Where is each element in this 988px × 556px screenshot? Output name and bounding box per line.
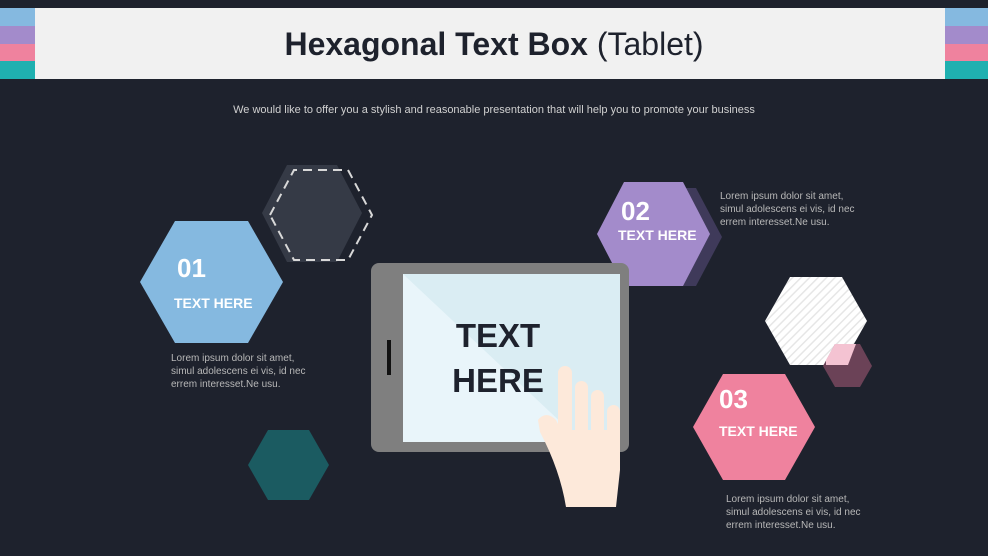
text block 02: Lorem ipsum dolor sit amet,: [720, 191, 843, 202]
tablet: TEXT: [456, 317, 540, 354]
text block 02: simul adolescens ei vis, id nec: [720, 204, 855, 215]
subtitle: We would like to offer you a stylish and reasonable presentation that will help you to promote your business: [233, 104, 755, 116]
text block 01: simul adolescens ei vis, id nec: [171, 366, 306, 377]
hexagon 01: TEXT HERE: [174, 295, 253, 311]
text block 01: errem interesset.Ne usu.: [171, 379, 280, 390]
hexagon 03: [693, 374, 815, 480]
text block 03: simul adolescens ei vis, id nec: [726, 507, 861, 518]
title: Hexagonal Text Box (Tablet): [284, 26, 704, 62]
header bar: [0, 8, 988, 79]
teal hexagon: [248, 430, 329, 500]
hexagon 03: TEXT HERE: [719, 423, 798, 439]
hexagon 03: 03: [719, 384, 748, 414]
hexagon 01: [140, 221, 283, 343]
hexagon 02: TEXT HERE: [618, 227, 697, 243]
hexagon 02: 02: [621, 196, 650, 226]
hexagon 02: [597, 182, 722, 286]
striped hexagon: [765, 277, 872, 387]
tablet: [371, 263, 629, 452]
text block 02: errem interesset.Ne usu.: [720, 217, 830, 228]
icon: hand: [538, 366, 620, 507]
hexagon 01: 01: [177, 253, 206, 283]
tablet: HERE: [452, 362, 544, 399]
text block 03: Lorem ipsum dolor sit amet,: [726, 494, 849, 505]
text block 01: Lorem ipsum dolor sit amet,: [171, 353, 294, 364]
text block 03: errem interesset.Ne usu.: [726, 520, 836, 531]
dashed hexagon: [262, 165, 372, 262]
